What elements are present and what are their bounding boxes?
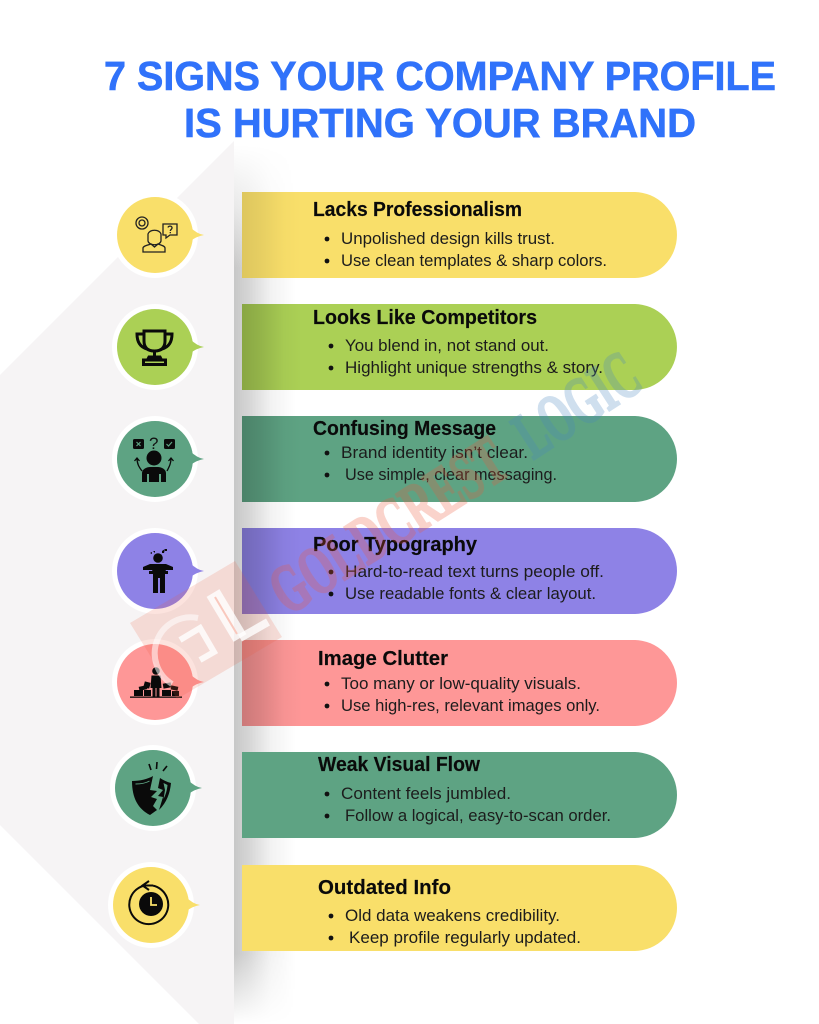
bullet list xyxy=(329,337,603,377)
icon: person standing in clutter xyxy=(130,667,182,698)
heading: Poor Typography xyxy=(313,534,478,556)
watermark: Goldcrest Logic logo and wordmark: LOGIC xyxy=(500,336,654,473)
icon: frustrated person xyxy=(143,549,173,593)
heading: Confusing Message xyxy=(313,418,496,440)
heading: Lacks Professionalism xyxy=(313,199,522,221)
watermark: Goldcrest Logic logo and wordmark xyxy=(130,336,654,699)
bullet list xyxy=(325,675,600,715)
badge: cracked shield xyxy=(110,745,202,831)
bullet list: Unpolished design kills trust. xyxy=(341,230,555,248)
bullet list: Use simple, clear messaging. xyxy=(345,466,557,484)
bullet list: Use readable fonts & clear layout. xyxy=(345,585,596,603)
panel: Confusing Message xyxy=(242,416,677,502)
bullet list: Content feels jumbled. xyxy=(341,785,511,803)
icon: confused person xyxy=(136,217,177,252)
bullet list: Keep profile regularly updated. xyxy=(349,929,581,947)
panel: Weak Visual Flow xyxy=(242,752,677,838)
heading: Image Clutter xyxy=(318,648,448,670)
panel: Outdated Info xyxy=(242,865,677,951)
bullet list: You blend in, not stand out. xyxy=(345,337,549,355)
title: 7 SIGNS YOUR COMPANY PROFILE xyxy=(104,53,776,99)
title: IS HURTING YOUR BRAND xyxy=(184,100,696,146)
heading: Outdated Info xyxy=(318,877,451,899)
icon: person deciding between options: ? xyxy=(149,434,158,453)
bullet list: Brand identity isn’t clear. xyxy=(341,444,528,462)
badge: shrugging person xyxy=(112,528,204,614)
bullet list: Use high-res, relevant images only. xyxy=(341,697,600,715)
bullet list: Highlight unique strengths & story. xyxy=(345,359,603,377)
panel: Poor Typography xyxy=(242,528,677,614)
heading: Looks Like Competitors xyxy=(313,307,537,329)
bullet list xyxy=(325,785,611,825)
bullet list xyxy=(325,230,607,270)
bullet list xyxy=(325,444,557,484)
shadow behind the bars xyxy=(234,168,280,1013)
panel: Looks Like Competitors xyxy=(242,304,677,390)
bullet list: Hard-to-read text turns people off. xyxy=(345,563,604,581)
bullet list: Follow a logical, easy-to-scan order. xyxy=(345,807,611,825)
title xyxy=(104,53,776,146)
background: light grey diamond panel xyxy=(0,141,234,1024)
badge: clock with return arrow xyxy=(108,862,200,948)
panel: Image Clutter xyxy=(242,640,677,726)
badge: trophy xyxy=(112,304,204,390)
badge: person with question bubble xyxy=(112,192,204,278)
bullet list xyxy=(329,563,604,603)
icon: broken shield xyxy=(132,762,171,815)
bullet list: Old data weakens credibility. xyxy=(345,907,560,925)
icon: history clock xyxy=(129,881,168,924)
bullet list: Too many or low-quality visuals. xyxy=(341,675,581,693)
badge: person on clutter pile xyxy=(112,639,204,725)
heading: Weak Visual Flow xyxy=(318,754,480,776)
bullet list xyxy=(329,907,581,947)
watermark logo xyxy=(130,561,282,699)
panel: Lacks Professionalism xyxy=(242,192,677,278)
bullet list: Use clean templates & sharp colors. xyxy=(341,252,607,270)
watermark text: GOLDCREST xyxy=(255,422,520,629)
icon: trophy xyxy=(137,331,172,364)
badge: person choosing xyxy=(112,416,204,502)
